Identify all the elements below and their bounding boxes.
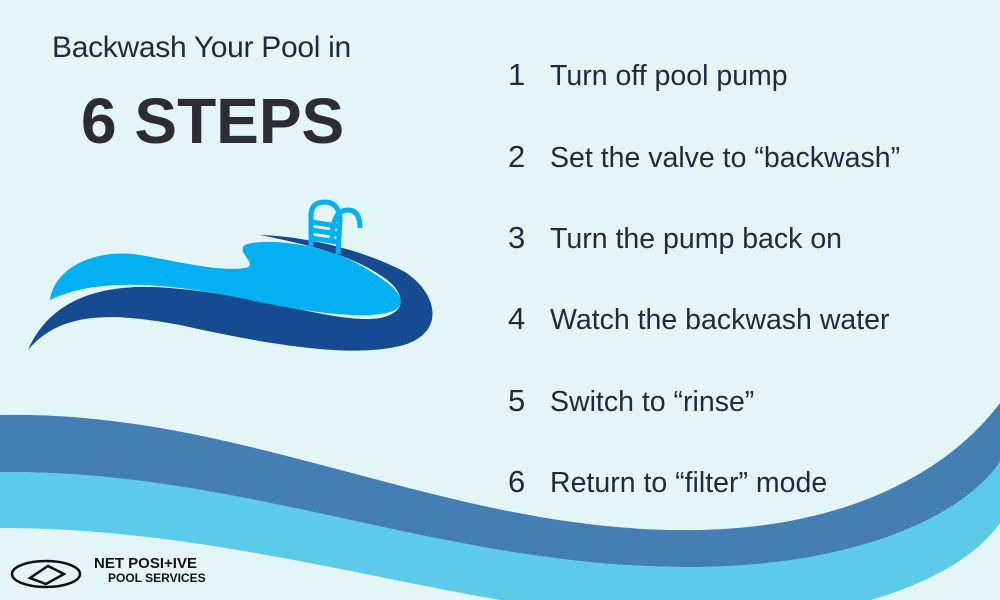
step 3: 3 — [508, 220, 525, 255]
heading: 6 STEPS: 6 STEPS — [81, 85, 344, 157]
title: Backwash Your Pool in — [52, 31, 351, 64]
step 6: Return to “filter” mode — [550, 467, 827, 499]
step 3: Turn the pump back on — [550, 223, 842, 255]
step 6: 6 — [508, 464, 525, 499]
step 1: 1 — [508, 57, 525, 92]
step 1: Turn off pool pump — [550, 60, 788, 92]
step 2: 2 — [508, 139, 525, 174]
step 2: Set the valve to “backwash” — [550, 142, 900, 174]
step 5: 5 — [508, 383, 525, 418]
logo: POOL SERVICES — [108, 571, 206, 585]
step 4: Watch the backwash water — [550, 304, 890, 336]
step 4: 4 — [508, 301, 525, 336]
logo: NET POSI+IVE — [94, 555, 197, 572]
step 5: Switch to “rinse” — [550, 386, 754, 418]
icon: pool — [28, 200, 432, 351]
logo — [10, 555, 206, 588]
